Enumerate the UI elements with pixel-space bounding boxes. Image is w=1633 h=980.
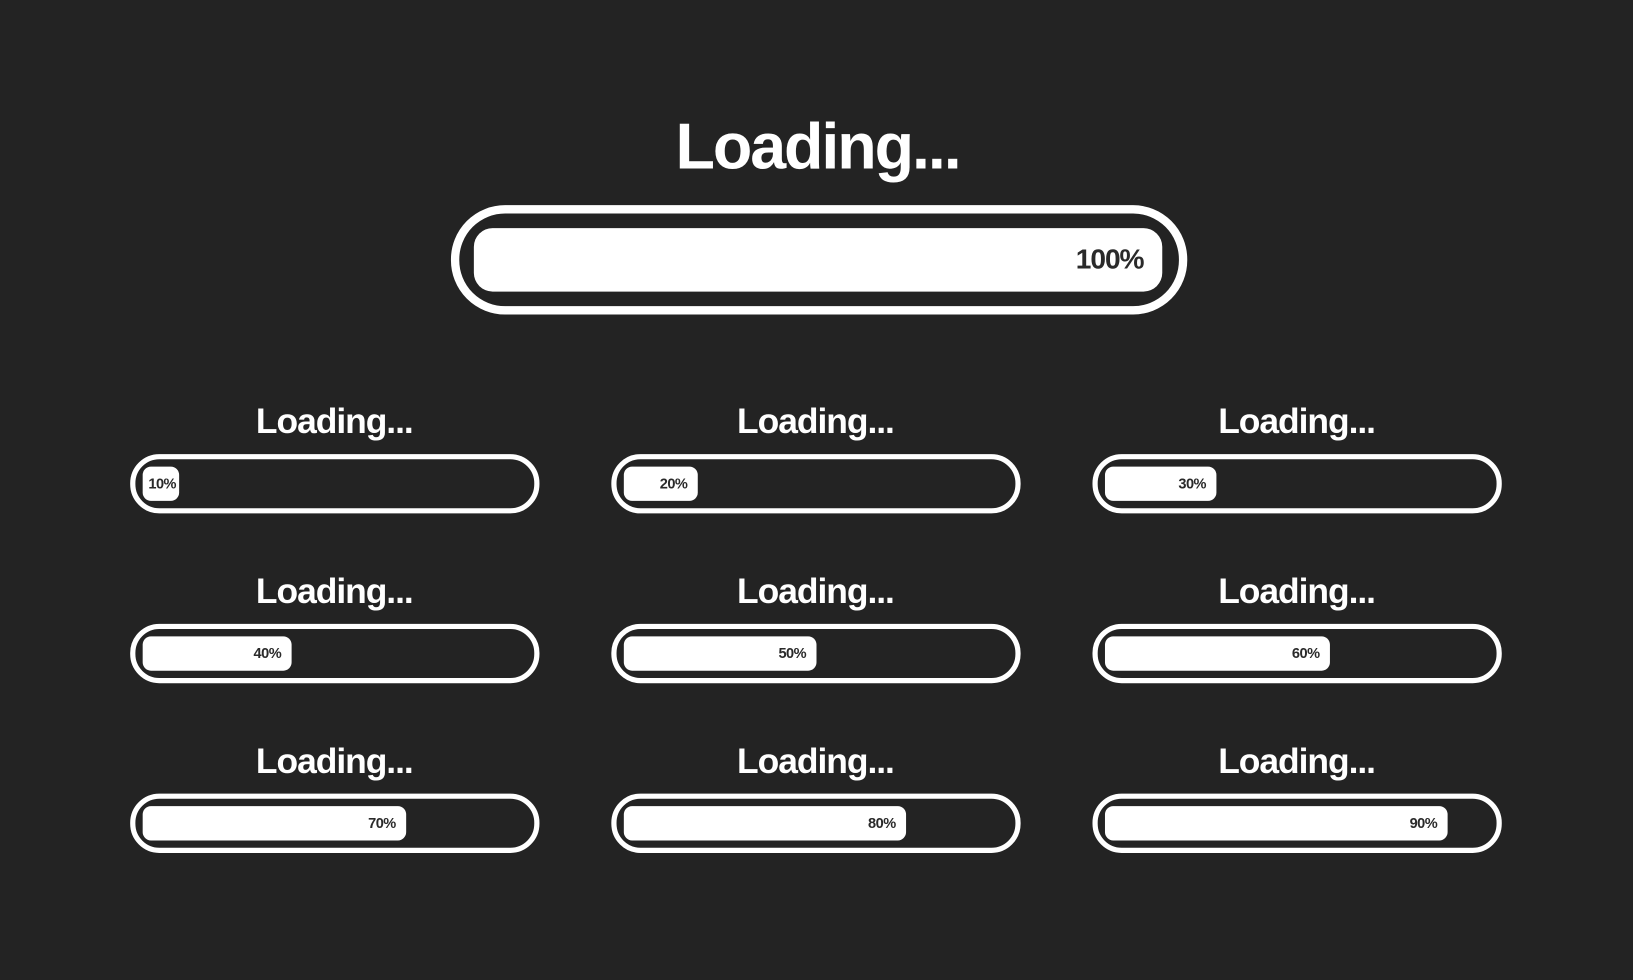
bar 80%: 80% — [868, 814, 896, 831]
bar 60% — [1092, 624, 1502, 683]
bar 20%: 20% — [660, 475, 687, 492]
bar 80% — [611, 794, 1021, 853]
fill 100%: 100% — [1076, 244, 1144, 275]
label row3 col1: Loading... — [256, 742, 413, 781]
label row2 col1: Loading... — [256, 572, 413, 611]
label row1 col3: Loading... — [1218, 402, 1375, 442]
bar 30% — [1092, 454, 1502, 513]
bar 90% — [1092, 794, 1502, 853]
bar 70% — [130, 794, 539, 853]
title: Loading... — [676, 111, 960, 183]
bar 50% — [611, 624, 1021, 683]
bar 10% — [130, 454, 539, 513]
label row2 col2: Loading... — [737, 572, 894, 611]
fill 100% — [474, 228, 1162, 292]
bar 30%: 30% — [1178, 475, 1206, 492]
bar 50%: 50% — [778, 645, 806, 661]
bar 60%: 60% — [1292, 645, 1320, 661]
bar 40%: 40% — [254, 645, 281, 661]
label row3 col3: Loading... — [1218, 742, 1375, 781]
bar 10%: 10% — [148, 475, 176, 492]
bar 90%: 90% — [1410, 814, 1437, 831]
bar 40% — [130, 624, 539, 683]
bar 20% — [611, 454, 1021, 513]
label row1 col1: Loading... — [256, 402, 413, 442]
label row2 col3: Loading... — [1218, 572, 1375, 611]
label row1 col2: Loading... — [737, 402, 894, 442]
label row3 col2: Loading... — [737, 742, 894, 781]
bar 70%: 70% — [368, 814, 396, 831]
main progress bar 100% — [451, 205, 1187, 315]
